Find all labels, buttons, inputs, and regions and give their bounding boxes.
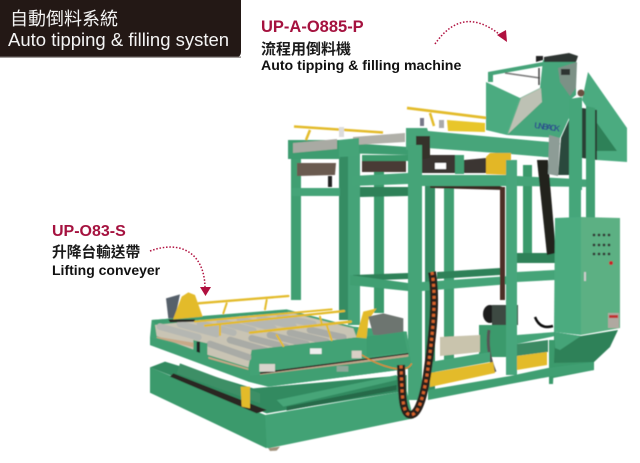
upper conveyor drive parts [297, 155, 486, 187]
label: lifting conveyer: UP-O83-S [52, 223, 126, 240]
logo: Uniback: UNIBACK [534, 120, 562, 134]
motor and pump [479, 305, 553, 372]
yellow guards and motors [166, 292, 407, 357]
yellow base bars [430, 335, 547, 387]
yellow safety rails lower [195, 296, 351, 346]
cable chain [401, 272, 434, 415]
front tower column [408, 145, 422, 400]
control cabinet [549, 217, 620, 384]
label: lifting conveyer [52, 223, 161, 278]
label: tipping and filling machine [261, 18, 461, 73]
lifting base [150, 362, 413, 451]
header banner: 自動倒料系統 [10, 9, 118, 29]
arrow: to tipping machine [435, 22, 507, 44]
header banner: Auto tipping & filling systen [8, 29, 229, 50]
lifting rollers [160, 317, 343, 357]
main column right [506, 160, 517, 375]
lifting platform [150, 309, 412, 387]
label: tipping and filling machine: Auto tipping & filling machine [261, 57, 461, 73]
label: tipping and filling machine: UP-A-O885-P [261, 18, 364, 36]
yellow safety rails upper [294, 108, 503, 140]
label: lifting conveyer: 升降台輸送帶 [52, 243, 140, 261]
dark hydraulic arm and hoses [500, 160, 556, 300]
tower frame columns and beams [291, 100, 595, 390]
arrow: to lifting conveyer [150, 247, 211, 296]
upper conveyor rollers and frame [288, 128, 560, 160]
rear base rail [428, 362, 594, 400]
header banner [0, 0, 241, 58]
label: tipping and filling machine: 流程用倒料機 [261, 40, 351, 58]
machine illustration [150, 53, 627, 451]
yellow housing upper [486, 153, 511, 175]
hopper [486, 53, 627, 190]
label: lifting conveyer: Lifting conveyer [52, 262, 161, 278]
